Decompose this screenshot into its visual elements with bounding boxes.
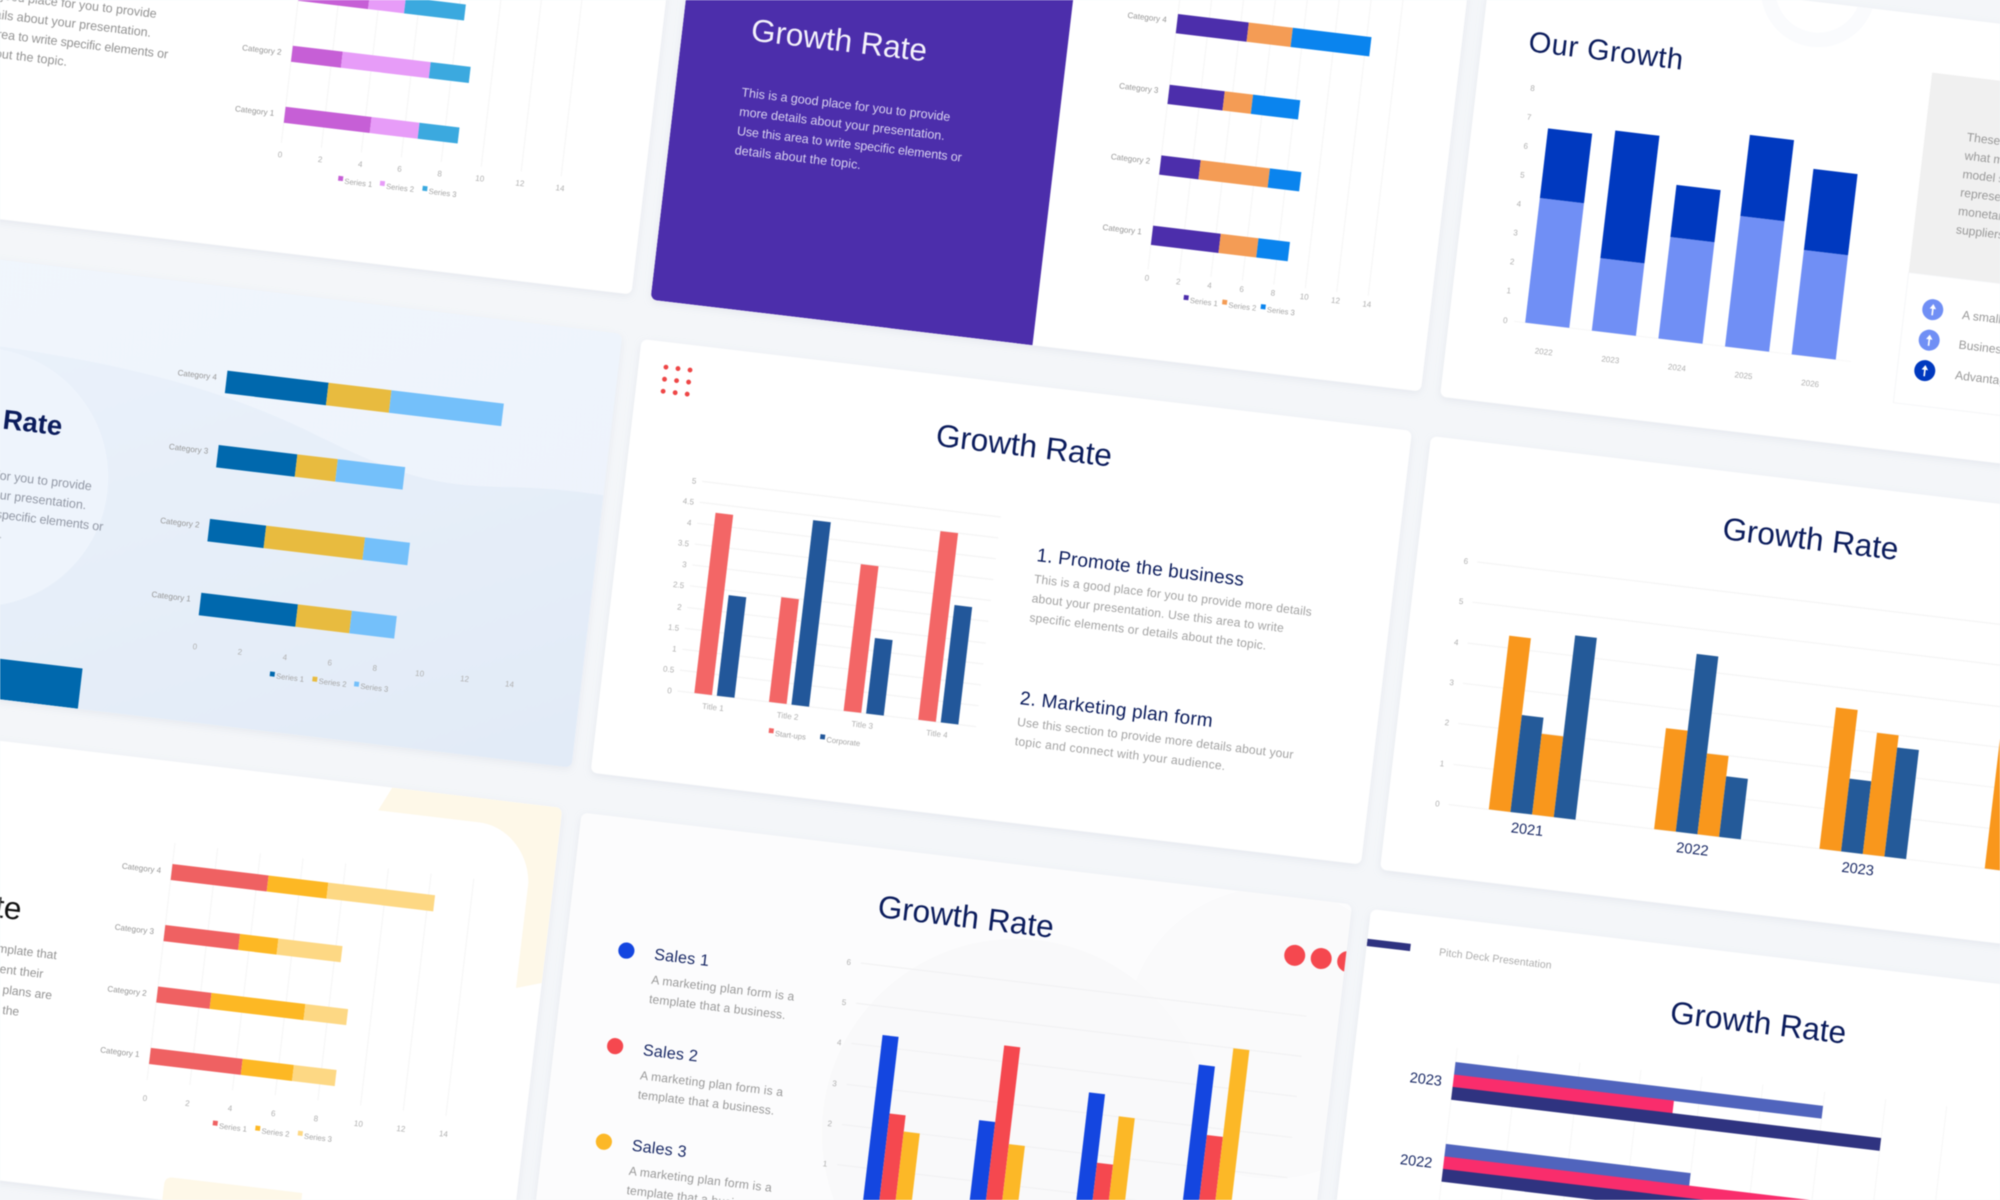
text block: Promote the business: about your presentation. Use this area to write [1031,591,1285,635]
bar chart: stacked horizontal bars: 14 [505,679,515,689]
icon: red dot grid [660,364,693,397]
panel: bottom-middle slide, sales [595,896,1348,1200]
bar chart: grouped columns by year: 6 [1463,557,1469,566]
bar chart: three series grouped columns: 5 [841,998,847,1007]
text block: Marketing plan form: topic and connect with your audience. [1014,734,1226,773]
bar chart: stacked horizontal bars: 0 [277,150,283,160]
bar chart: start-ups versus corporate: 1 [672,644,678,654]
text block: purple panel description [734,87,962,170]
text block: Marketing plan form: 2. Marketing plan form [1019,688,1214,732]
heading: bottom-middle slide title: Growth Rate [876,888,1056,945]
bar chart: stacked horizontal bars: Series 2 [386,182,415,194]
bar chart: horizontal bars by year: 2022 [1399,1152,1433,1172]
bar chart: stacked horizontal bars: 14 [438,1129,449,1139]
bar chart: stacked columns: 7 [1526,113,1532,122]
bar chart: stacked horizontal bars: Series 3 [428,187,457,199]
text block: slide description [0,0,169,67]
bar chart: stacked horizontal bars: Series 1 [218,1122,247,1134]
text block: Promote the business: specific elements or details about the topic. [1029,610,1267,653]
text block: Promote the business: This is a good place for you to provide more details [1033,572,1313,619]
bar chart: start-ups versus corporate: 2 [677,603,683,612]
bar chart: stacked horizontal bars: 4 [357,160,363,169]
list item: Sales 3 [590,1132,776,1200]
bar chart: stacked horizontal bars: 10 [353,1119,364,1129]
list item: Sales 2: template that a business. [637,1088,775,1118]
bar chart: stacked horizontal bars: 4 [282,653,288,662]
bar chart: stacked horizontal bars: Category 2 [1110,152,1151,166]
bar chart: stacked horizontal bars: 12 [515,178,525,189]
bar chart: stacked horizontal bars: 14 [1362,299,1372,309]
bar chart: stacked horizontal bars: 2 [1175,277,1182,287]
bar chart: stacked horizontal bars: 12 [1331,296,1341,306]
bar chart: three series grouped columns: 1 [822,1159,828,1169]
bar chart: stacked horizontal bars: 8 [437,169,443,179]
bar chart: grouped columns by year: 1 [1439,759,1445,769]
bar chart: stacked horizontal bars: Category 1 [235,104,275,118]
bar chart: stacked columns: 2024 [1667,362,1687,373]
heading: middle-right slide title: Growth Rate [1721,510,1901,567]
bar chart: stacked horizontal bars: Series 2 [261,1127,290,1139]
bar chart: three series grouped columns: 2 [827,1119,833,1129]
panel: middle-right slide, orange and blue columns [1380,436,2000,962]
list item: Sales 3: Sales 3 [631,1137,688,1161]
heading: centre slide title: Growth Rate [934,417,1114,474]
panel: list of arrows [1914,298,2000,386]
bar chart: stacked horizontal bars: 10 [1299,292,1310,302]
bar chart: stacked horizontal bars: 0 [192,642,198,652]
panel: centre slide [591,339,1412,865]
bar chart: stacked horizontal bars: Series 3 [304,1132,332,1144]
bar chart: stacked horizontal bars: Category 2 [107,984,148,998]
bar chart: grouped columns by year: 0 [1435,799,1441,809]
list item: Sales 1: Sales 1 [653,946,710,970]
bar chart: grouped columns by year: 2023 [1841,860,1875,880]
bar chart: start-ups versus corporate: Corporate [826,735,861,748]
bar chart: stacked horizontal bars: Category 4 [177,368,218,382]
icon: three red dots [1284,944,1348,972]
bar chart: stacked columns: 2025 [1734,370,1753,381]
bar chart: grouped columns by year: 5 [1458,597,1464,606]
bar chart: stacked horizontal bars: Series 2 [318,677,347,689]
text block: Promote the business [1029,545,1316,657]
text block: Marketing plan form [1015,690,1294,770]
bar chart: start-ups versus corporate: 5 [691,476,697,486]
bar chart: start-ups versus corporate: 4.5 [682,497,695,507]
heading: Our Growth: Our Growth [1527,26,1685,77]
list item: Sales 2: Sales 2 [642,1041,699,1066]
bar chart: stacked horizontal bars [234,0,564,198]
bar chart: start-ups versus corporate: 0.5 [663,664,675,675]
panel: bottom-left slide, red and yellow stacked bars [0,716,562,1200]
bar chart: stacked horizontal bars: Category 1 [1102,223,1143,236]
bar chart: stacked columns: 4 [1516,199,1522,209]
bar chart: stacked horizontal bars [151,370,514,692]
bar chart: start-ups versus corporate: 4 [687,518,693,528]
bar chart: stacked horizontal bars: Category 4 [1127,11,1168,24]
bar chart: start-ups versus corporate: 2.5 [672,580,685,590]
bar chart: stacked columns: 6 [1523,141,1529,151]
bar chart: grouped columns by year: 4 [1454,638,1460,647]
bar chart: stacked horizontal bars: 10 [415,669,425,679]
list item: Sales 3: A marketing plan form is a [628,1164,773,1195]
text block: blue slide description [0,470,104,538]
bar chart: stacked horizontal bars: 2 [237,647,243,657]
bar chart: stacked horizontal bars: Category 2 [160,516,201,530]
bar chart: horizontal bars by year: 2023 [1409,1070,1443,1090]
bar chart: grouped columns by year: 2 [1444,718,1450,728]
bar chart: stacked columns: 5 [1520,170,1526,180]
text block: purple panel description: details about the topic. [734,143,862,172]
bar chart: stacked horizontal bars: Category 1 [151,590,192,604]
text block: purple panel description: This is a good place for you to provide [741,85,951,124]
heading: purple panel title: Growth Rate [749,12,929,68]
bar chart: stacked horizontal bars: 10 [475,174,485,184]
bar chart: stacked columns: 1 [1506,286,1512,296]
bar chart: stacked columns: 2 [1509,257,1515,267]
bar chart: start-ups versus corporate: 1.5 [667,623,680,633]
panel: grey explanation box [1909,73,2000,283]
bar chart: start-ups versus corporate: Title 3 [851,719,874,731]
list item: Sales 1 [612,941,799,1023]
bar chart: stacked horizontal bars: 8 [1270,288,1276,298]
bar chart: stacked horizontal bars [1102,12,1372,316]
bar chart: stacked horizontal bars [100,862,448,1142]
bar chart: stacked columns: 2026 [1801,378,1820,389]
bar chart: stacked horizontal bars: 4 [227,1104,233,1113]
bar chart: stacked horizontal bars: 14 [555,183,566,193]
bar chart: stacked horizontal bars: 6 [397,164,403,174]
bar chart: stacked horizontal bars: 2 [317,155,323,164]
panel: top-left slide, purple and blue stacked bars [0,0,682,295]
bar chart: stacked columns [1499,84,1879,393]
list item: Sales 1: template that a business. [648,992,786,1022]
bar chart: start-ups versus corporate: Start-ups [774,729,807,742]
bar chart: start-ups versus corporate: Title 4 [926,728,949,740]
bar chart: three series grouped columns: 3 [832,1079,838,1088]
bar chart: stacked columns: 2022 [1534,346,1554,358]
bar chart: stacked horizontal bars: Series 1 [1189,296,1218,308]
bar chart: stacked horizontal bars: Category 4 [121,862,162,875]
bar chart: stacked horizontal bars: Category 3 [114,923,155,936]
list item: Sales 1: A marketing plan form is a [651,973,795,1004]
bar chart: three series grouped columns: 4 [837,1038,843,1047]
bar chart: horizontal bars by year [1378,1043,1947,1200]
bar chart: stacked horizontal bars: Series 1 [276,672,305,684]
panel: bottom-right slide, horizontal year bars [1320,909,2000,1200]
bar chart: start-ups versus corporate: 3.5 [677,538,690,549]
bar chart: start-ups versus corporate: 3 [682,560,688,570]
bar chart: stacked columns: 2023 [1601,354,1620,365]
bar chart: stacked horizontal bars: 8 [372,664,378,673]
bar chart: stacked horizontal bars: 0 [142,1094,148,1103]
bar chart: stacked horizontal bars: 6 [1239,285,1245,294]
panel: middle-left blue slide [0,347,604,768]
list item: Sales 2 [601,1037,787,1119]
text block: Marketing plan form: Use this section to provide more details about your [1016,715,1294,762]
bar chart: stacked horizontal bars: 12 [460,674,470,684]
heading: bottom-right slide title: Growth Rate [1668,994,1848,1051]
text block: purple panel description: more details about your presentation. [739,105,946,143]
text block: Promote the business: 1. Promote the business [1036,545,1245,591]
bar chart: stacked horizontal bars: Series 2 [1228,301,1257,313]
text block: bottom-left description [0,945,58,1016]
bar chart: three series grouped columns: 6 [846,958,852,967]
bar chart: stacked horizontal bars: Category 3 [168,442,209,456]
bar chart: stacked horizontal bars: Series 3 [1266,305,1295,317]
list item: Sales 2: A marketing plan form is a [639,1068,784,1099]
bar chart: start-ups versus corporate: Title 1 [702,702,725,713]
bar chart: grouped columns by year: 2022 [1675,840,1709,860]
bar chart: stacked horizontal bars: 6 [271,1109,277,1119]
bar chart: stacked horizontal bars: 4 [1207,281,1213,290]
panel: top-right slide Our Growth [1440,0,2000,489]
bar chart: stacked horizontal bars: 0 [1144,273,1150,283]
bar chart: stacked horizontal bars: 2 [185,1099,191,1108]
bar chart: stacked horizontal bars: Series 3 [360,682,389,694]
bar chart: stacked horizontal bars: Series 1 [344,177,373,189]
bar chart: grouped columns by year: 2021 [1510,820,1544,840]
bar chart: stacked horizontal bars: 6 [327,658,333,668]
bar chart: stacked horizontal bars: 12 [396,1124,406,1134]
bar chart: grouped columns by year [1435,558,2000,876]
bar chart: stacked columns: 0 [1502,316,1509,325]
bar chart: start-ups versus corporate: Title 2 [776,711,799,722]
bar chart: stacked horizontal bars: Category 2 [242,43,282,57]
bar chart: stacked horizontal bars: 8 [313,1114,319,1124]
bar chart: stacked columns: 3 [1513,228,1519,238]
bar chart: three series grouped columns [818,958,1307,1200]
bar chart: grouped columns by year: 3 [1449,678,1455,687]
bar chart: stacked horizontal bars: Category 3 [1119,81,1159,95]
caption: Pitch Deck Presentation: Pitch Deck Presentation [1438,946,1552,972]
bar chart: start-ups versus corporate [662,478,973,746]
decorative blue block [0,658,84,710]
bar chart: stacked columns: 8 [1530,84,1536,93]
bar chart: start-ups versus corporate: 0 [667,686,673,696]
panel: top-middle slide with purple side [650,0,1472,392]
text block: purple panel description: Use this area to write specific elements or [736,124,963,165]
bar chart: stacked horizontal bars: Category 1 [100,1045,141,1059]
